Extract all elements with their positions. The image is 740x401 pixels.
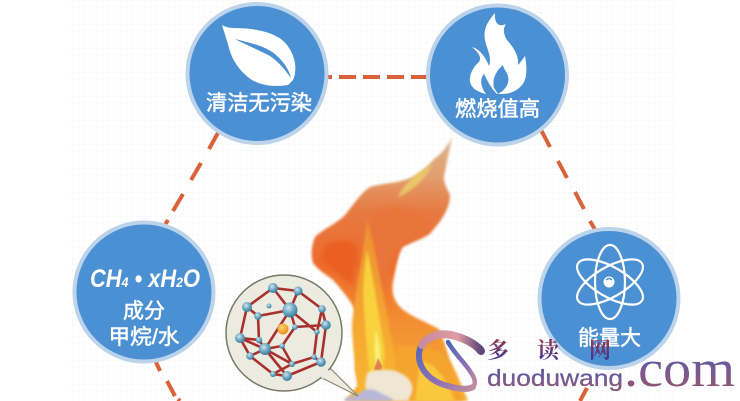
- badge: high combustion value: [428, 6, 567, 144]
- badge label: 能量大: [578, 327, 641, 350]
- callout: molecule structure: [226, 275, 358, 396]
- watermark: duoduwang.com: 读: [537, 334, 560, 365]
- central methane atom: [278, 324, 288, 334]
- watermark domain suffix: .com: [624, 341, 735, 398]
- composition label: 成分: [123, 300, 165, 323]
- chemical formula: CH4 • xH2O: [90, 265, 200, 293]
- smoke at flame base: [344, 370, 412, 401]
- flame illustration: [312, 137, 468, 401]
- badge: composition: [74, 222, 214, 362]
- watermark swirl logo: [419, 334, 481, 389]
- icon: flame: [470, 13, 526, 94]
- dashed hexagon connectors: [155, 77, 597, 401]
- molecule nodes: [235, 283, 331, 381]
- watermark: duoduwang.com: 网: [589, 334, 611, 365]
- watermark domain name: duoduwang: [487, 365, 623, 391]
- icon: atom: [570, 245, 650, 319]
- callout pointer: [322, 368, 358, 396]
- badge label: 燃烧值高: [455, 98, 540, 121]
- badge label: 清洁无污染: [206, 92, 312, 115]
- watermark Chinese characters: 多: [487, 334, 509, 365]
- watermark: duoduwang.com: [419, 334, 735, 398]
- badge: clean, no pollution: [188, 4, 326, 143]
- icon: leaf: [222, 25, 295, 86]
- badge: high energy: [540, 229, 678, 368]
- ingredient label: 甲烷/水: [108, 326, 180, 349]
